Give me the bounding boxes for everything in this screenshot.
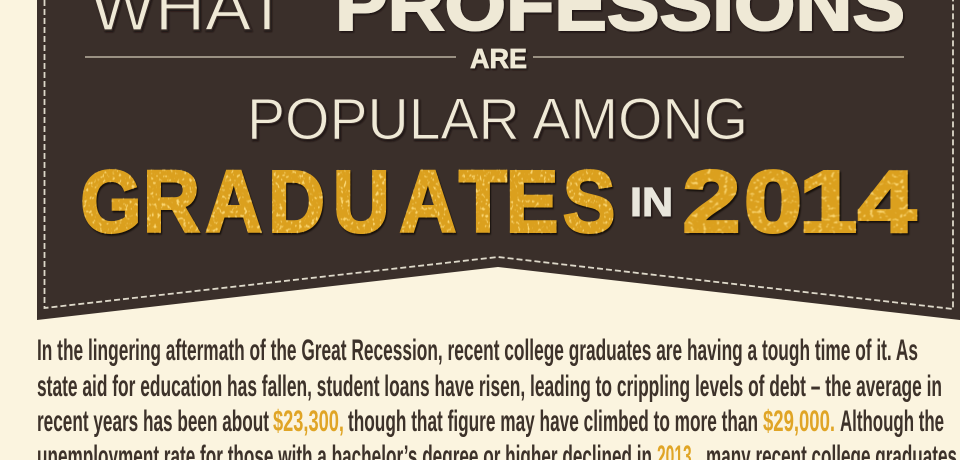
- title word: are: ARE: [470, 43, 527, 74]
- banner: [37, 0, 960, 320]
- banner stitching: [44, 0, 953, 309]
- title year: 2014: 2014: [683, 154, 916, 251]
- paragraph line 3: recent years has been about: [37, 405, 269, 438]
- title word: in: IN: [630, 179, 673, 225]
- intro paragraph: [37, 334, 957, 460]
- title: [80, 0, 916, 251]
- title rule right: [533, 56, 904, 58]
- paragraph line 3: $23,300,: [273, 405, 344, 438]
- paragraph line 3: [37, 405, 944, 438]
- title line: graduates: GRADUATES: [80, 153, 615, 250]
- title line: popular among: POPULAR AMONG: [247, 87, 748, 152]
- title rule left: [85, 56, 456, 58]
- paragraph line 3: $29,000.: [763, 405, 835, 438]
- banner shape: [37, 0, 960, 320]
